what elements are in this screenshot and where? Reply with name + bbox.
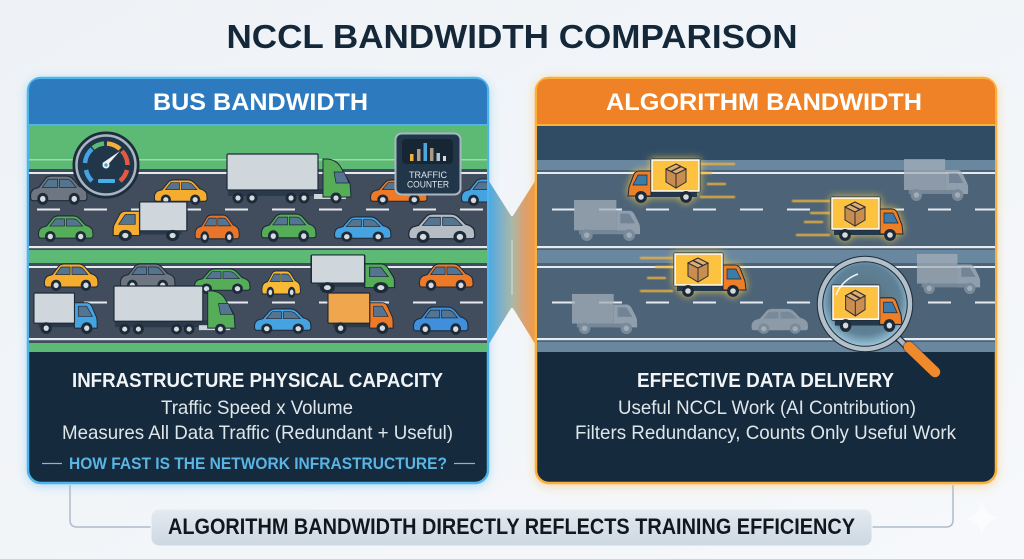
icon: traffic counter bbox=[396, 134, 460, 194]
text block: infrastructure physical capacity: Traffic Speed x Volume bbox=[161, 397, 353, 419]
conclusion banner: ALGORITHM BANDWIDTH DIRECTLY REFLECTS TRAINING EFFICIENCY bbox=[168, 514, 855, 539]
useful truck 1 bbox=[628, 159, 700, 203]
header: algorithm bandwidth: ALGORITHM BANDWIDTH bbox=[606, 89, 922, 116]
header: bus bandwidth bbox=[29, 79, 487, 125]
icon: speedometer gauge bbox=[74, 132, 138, 198]
useful truck 2 bbox=[831, 197, 903, 241]
highway scene: congested traffic bbox=[29, 126, 517, 352]
vehicles: lane 4 bbox=[34, 286, 468, 335]
text block: effective data delivery: EFFECTIVE DATA DELIVERY bbox=[637, 370, 895, 392]
panel frame bbox=[28, 78, 488, 483]
vehicles: lane 1 bbox=[30, 154, 517, 206]
panel: algorithm bandwidth bbox=[536, 78, 996, 483]
vehicles: lane 2 bbox=[38, 202, 475, 243]
useful truck 3 bbox=[674, 253, 746, 297]
text block: infrastructure physical capacity: INFRASTRUCTURE PHYSICAL CAPACITY bbox=[72, 370, 444, 392]
icon: traffic counter: TRAFFIC bbox=[409, 170, 447, 181]
text block: infrastructure physical capacity bbox=[62, 370, 453, 444]
connector: left panel to conclusion bbox=[70, 485, 151, 527]
conclusion banner bbox=[151, 509, 872, 546]
icon: sparkle bbox=[965, 501, 999, 536]
icon: traffic counter: COUNTER bbox=[407, 180, 449, 190]
text block: effective data delivery: Filters Redundancy, Counts Only Useful Work bbox=[575, 422, 956, 444]
vehicles: lane 3 bbox=[44, 255, 473, 298]
panel: bus bandwidth bbox=[28, 78, 517, 483]
title: NCCL BANDWIDTH COMPARISON bbox=[226, 18, 798, 55]
text block: infrastructure physical capacity: Measures All Data Traffic (Redundant + Useful) bbox=[62, 422, 453, 444]
ghost vehicles: redundant traffic bbox=[572, 159, 980, 334]
text block: effective data delivery bbox=[575, 370, 956, 444]
connector: bridge between panels bbox=[487, 178, 537, 347]
callout: how fast is the network infrastructure: HOW FAST IS THE NETWORK INFRASTRUCTURE? bbox=[69, 454, 447, 473]
text block: effective data delivery: Useful NCCL Work (AI Contribution) bbox=[618, 397, 916, 419]
highway scene: filtered useful traffic bbox=[537, 126, 995, 352]
icon: magnifying glass over useful truck bbox=[820, 259, 935, 372]
header: bus bandwidth: BUS BANDWIDTH bbox=[153, 89, 368, 116]
speed lines bbox=[640, 164, 830, 291]
connector: right panel to conclusion bbox=[872, 485, 953, 527]
panel frame bbox=[536, 78, 996, 483]
header: algorithm bandwidth bbox=[537, 79, 995, 125]
